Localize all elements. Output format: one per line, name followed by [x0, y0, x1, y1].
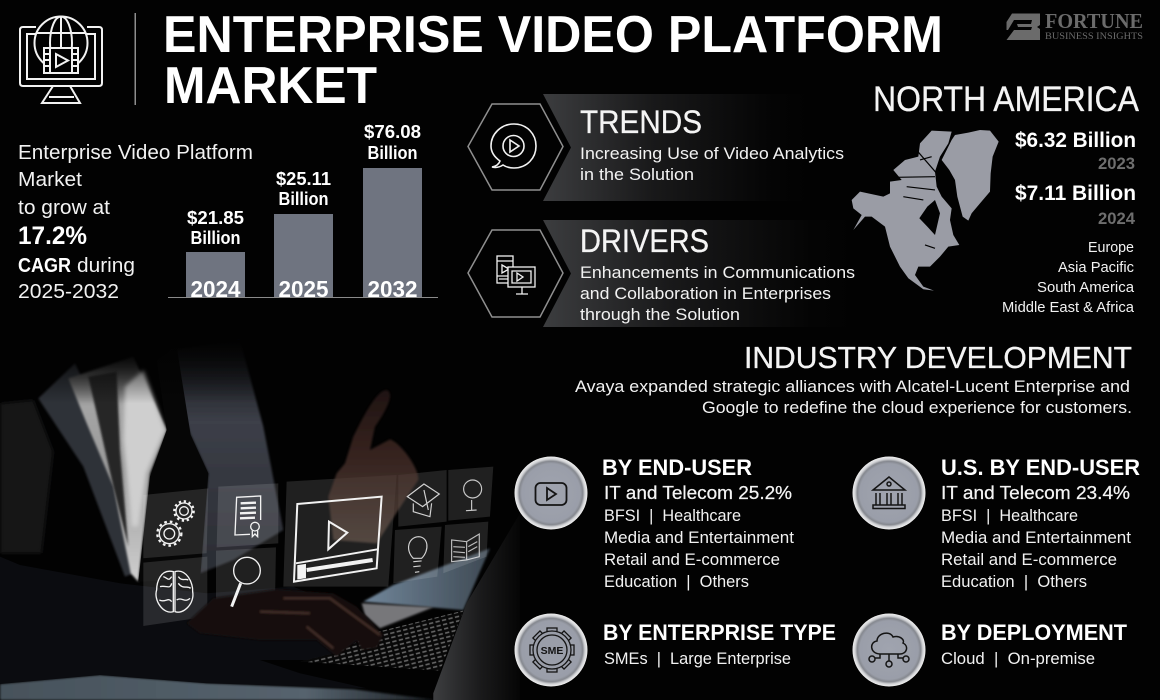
drivers heading: DRIVERS: [580, 223, 709, 259]
deployment text: [941, 620, 1128, 668]
keyboard: [300, 611, 463, 671]
trends heading: TRENDS: [580, 104, 702, 140]
growth summary text: 17.2%: [18, 222, 87, 250]
u.s. end-user list: IT and Telecom 23.4%: [941, 482, 1130, 503]
logo: Fortune Business Insights: FORTUNE: [1045, 9, 1143, 33]
panel: by deployment: [852, 614, 1128, 686]
icon: magnifying glass: [232, 557, 260, 607]
value 2023: 2023: [1098, 154, 1135, 173]
dark placket: [138, 347, 208, 582]
translucent icon tiles: [143, 467, 493, 626]
icon: SME gear: SME: [541, 645, 563, 657]
growth summary text: Enterprise Video Platform: [18, 142, 253, 164]
industry heading: INDUSTRY DEVELOPMENT: [744, 340, 1132, 375]
bar 2025: $25.11: [276, 169, 331, 189]
end-user list: BY END-USER: [602, 455, 752, 480]
icon: brain: [156, 571, 193, 612]
panel: by end-user: [514, 455, 794, 591]
trends hexagon: [468, 104, 563, 190]
icon: graduation cap: [407, 484, 439, 517]
jacket lapel: [38, 363, 133, 577]
forearm: [0, 557, 367, 688]
blue backdrop behind laptop: [363, 548, 490, 610]
growth summary text: 2025-2032: [18, 281, 119, 303]
drivers description: and Collaboration in Enterprises: [580, 284, 831, 303]
growth summary text: during: [77, 255, 135, 277]
desk surface: [0, 675, 437, 700]
icon: phone and monitor with video: [497, 256, 535, 294]
end-user list: [602, 455, 794, 591]
industry description: Google to redefine the cloud experience for customers.: [702, 398, 1132, 417]
title: MARKET: [164, 57, 377, 115]
bar 2024: $21.85: [187, 208, 244, 228]
bar chart: market size: [168, 122, 438, 302]
growth summary text: CAGR: [18, 255, 71, 277]
bar 2032: [363, 122, 422, 302]
value 2024: [1015, 182, 1136, 228]
u.s. end-user list: Media and Entertainment: [941, 528, 1131, 547]
trends banner: [543, 94, 815, 201]
enterprise type text: BY ENTERPRISE TYPE: [603, 620, 836, 645]
end-user list: IT and Telecom 25.2%: [604, 482, 792, 503]
growth summary text: [18, 142, 253, 303]
other regions: Asia Pacific: [1058, 259, 1134, 276]
enterprise type text: [603, 620, 836, 668]
icon: light bulb: [409, 537, 427, 572]
map: north america: [852, 130, 999, 291]
header divider: [134, 13, 136, 105]
bar 2032: $76.08: [364, 122, 421, 142]
photo: businessman using a laptop with floating video icons: [0, 340, 520, 700]
other regions: [1002, 239, 1135, 316]
bar 2025: [274, 169, 333, 302]
region heading: NORTH AMERICA: [873, 80, 1140, 119]
logo: Fortune Business Insights: [1006, 9, 1143, 42]
bar 2025: 2025: [278, 276, 329, 302]
icon: video play button: [514, 456, 588, 530]
jacket front: [170, 340, 283, 573]
pointing hand: [328, 390, 418, 543]
value 2023: $6.32 Billion: [1015, 129, 1136, 152]
other regions: Europe: [1088, 239, 1134, 256]
u.s. end-user list: U.S. BY END-USER: [941, 455, 1140, 480]
icon: cloud network: [852, 614, 926, 686]
other regions: Middle East & Africa: [1002, 299, 1135, 316]
bar 2032: 2032: [368, 276, 418, 302]
deployment text: BY DEPLOYMENT: [941, 620, 1128, 645]
drivers hexagon: [468, 230, 563, 317]
header icon: monitor with globe and video: [20, 16, 102, 103]
icon: speech bubble with play: [491, 124, 536, 168]
u.s. end-user list: [941, 455, 1140, 591]
industry description: [575, 377, 1132, 417]
icon: globe: [464, 480, 482, 511]
growth summary text: Market: [18, 169, 82, 191]
panel: u.s. by end-user: [852, 455, 1140, 591]
top shadow: [0, 340, 300, 403]
industry description: Avaya expanded strategic alliances with Alcatel-Lucent Enterprise and: [575, 377, 1130, 396]
other regions: South America: [1037, 279, 1135, 296]
end-user list: Retail and E-commerce: [604, 550, 780, 569]
icon: gears: [157, 501, 194, 546]
logo: Fortune Business Insights: BUSINESS INSIGHTS: [1045, 32, 1143, 42]
panel: trends: [468, 94, 844, 201]
u.s. end-user list: Retail and E-commerce: [941, 550, 1117, 569]
enterprise type text: SMEs | Large Enterprise: [604, 649, 791, 668]
deployment text: Cloud | On-premise: [941, 649, 1095, 668]
drivers description: [580, 263, 855, 324]
icon: video player: [294, 497, 382, 582]
panel: industry development: [575, 340, 1132, 417]
laptop lid: [433, 513, 520, 700]
end-user list: BFSI | Healthcare: [604, 506, 741, 525]
bar 2025: Billion: [278, 189, 328, 209]
bar 2024: [186, 208, 245, 302]
trends description: in the Solution: [580, 165, 694, 184]
icon: certificate: [235, 496, 261, 537]
growth summary text: to grow at: [18, 197, 110, 219]
title: [163, 6, 943, 115]
u.s. end-user list: Education | Others: [941, 572, 1087, 591]
panel: by enterprise type: [514, 614, 836, 686]
shirt: [68, 357, 167, 582]
drivers description: through the Solution: [580, 305, 740, 324]
left sleeve: [0, 400, 53, 553]
trends description: Increasing Use of Video Analytics: [580, 144, 844, 163]
icon: SME gear: [514, 614, 588, 686]
trends description: [580, 144, 844, 184]
value 2023: [1015, 129, 1136, 173]
shirt highlight: [123, 370, 165, 527]
value 2024: 2024: [1098, 209, 1136, 228]
u.s. end-user list: BFSI | Healthcare: [941, 506, 1078, 525]
icon: open book: [452, 534, 479, 562]
drivers banner: [543, 220, 860, 327]
end-user list: Education | Others: [604, 572, 749, 591]
laptop deck: [362, 603, 433, 628]
icon: bank building: [852, 456, 926, 530]
bar 2024: 2024: [190, 276, 241, 302]
typing hand: [187, 589, 383, 657]
drivers description: Enhancements in Communications: [580, 263, 855, 282]
value 2024: $7.11 Billion: [1015, 182, 1136, 205]
bar 2024: Billion: [190, 228, 240, 248]
tie: [88, 372, 128, 547]
title: ENTERPRISE VIDEO PLATFORM: [163, 6, 943, 64]
bar 2032: Billion: [368, 143, 418, 163]
panel: north america: [852, 80, 1140, 316]
end-user list: Media and Entertainment: [604, 528, 794, 547]
panel: drivers: [468, 220, 860, 327]
